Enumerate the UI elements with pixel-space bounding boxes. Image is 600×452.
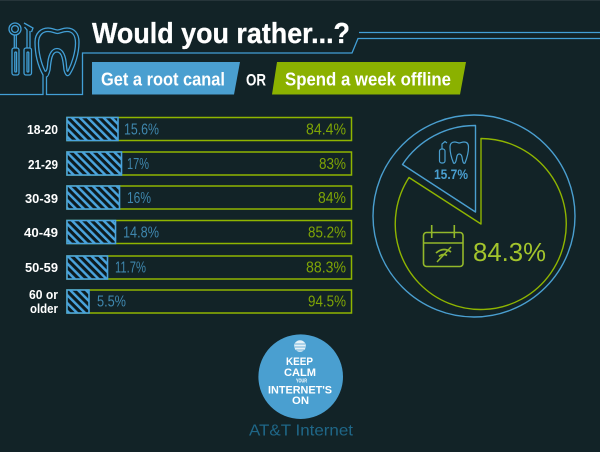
icon: calendar with no wifi <box>424 225 463 266</box>
pie chart: overall result <box>373 115 575 317</box>
title: Would you rather...? <box>92 18 350 50</box>
row 21-29: 21-29 <box>28 158 58 172</box>
icon: dental mirror <box>9 23 21 75</box>
row 60 or older: 60 or <box>29 288 58 302</box>
row 18-20 <box>27 118 352 140</box>
badge: keep calm your internet's on: YOUR <box>296 378 307 384</box>
icon: small dental tool <box>440 142 447 163</box>
icon: small tooth <box>450 142 468 163</box>
pie slice: root canal 15.7% <box>402 125 476 212</box>
row 60 or older: older <box>30 302 58 316</box>
row 40-49 <box>24 220 352 244</box>
row 40-49: 14.8% <box>123 224 159 242</box>
option: spend a week offline <box>272 62 466 94</box>
option: spend a week offline: Spend a week offline <box>285 68 451 90</box>
OR label: OR <box>246 70 266 90</box>
row 40-49: 85.2% <box>308 224 346 242</box>
row 21-29: 83% <box>319 156 346 173</box>
pie slice: offline 84.3% <box>395 138 566 309</box>
row 30-39: 84% <box>318 190 346 207</box>
row 21-29 <box>28 152 352 175</box>
value: 84.3%: 84.3% <box>473 237 546 267</box>
row 30-39: 30-39 <box>25 192 58 206</box>
value: 15.7%: 15.7% <box>434 166 468 182</box>
badge: keep calm your internet's on: INTERNET'S <box>268 384 332 396</box>
option: get a root canal <box>92 62 240 94</box>
bar chart: answers by age group <box>24 118 352 316</box>
row 50-59 <box>25 256 352 279</box>
row 50-59: 88.3% <box>306 260 346 276</box>
row 40-49: 40-49 <box>24 226 58 240</box>
row 18-20: 15.6% <box>124 122 159 138</box>
badge: keep calm your internet's on: CALM <box>284 367 316 379</box>
icon: AT&T globe <box>294 340 306 352</box>
option: get a root canal: Get a root canal <box>101 68 225 90</box>
badge: keep calm your internet's on: ON <box>292 395 309 407</box>
row 30-39: 16% <box>127 190 151 207</box>
brand: AT&T Internet: AT&T Internet <box>249 422 354 440</box>
row 60 or older: 94.5% <box>308 294 346 310</box>
badge: keep calm your internet's on: KEEP <box>286 356 313 368</box>
row 60 or older: 5.5% <box>97 294 126 310</box>
row 18-20: 18-20 <box>27 123 58 137</box>
row 50-59: 11.7% <box>115 260 146 276</box>
row 50-59: 50-59 <box>25 261 58 275</box>
row 18-20: 84.4% <box>306 122 346 138</box>
badge: keep calm your internet's on <box>258 334 343 419</box>
row 21-29: 17% <box>127 156 149 173</box>
row 30-39 <box>25 186 352 209</box>
row 60 or older <box>29 288 352 316</box>
icon: dental probe <box>24 23 33 75</box>
header connector lines and tooth icon <box>0 28 600 94</box>
